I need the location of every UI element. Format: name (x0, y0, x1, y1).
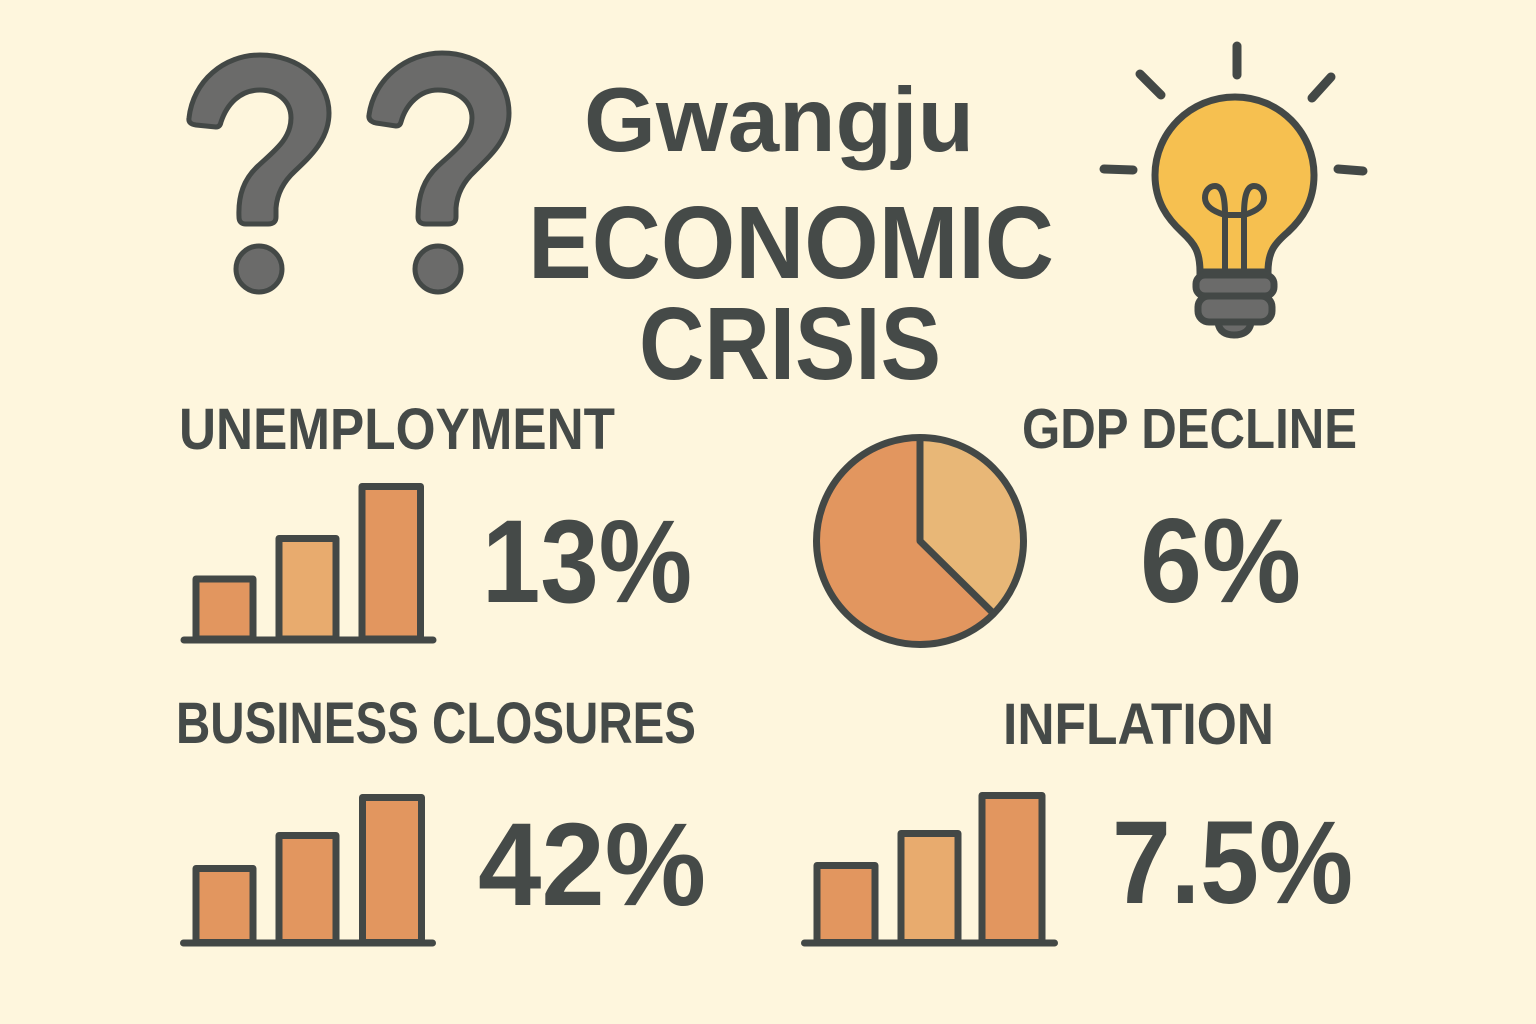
stat: 6%: 6% (1140, 494, 1301, 628)
bar chart: unemployment (184, 486, 433, 640)
icon: left question mark (189, 55, 329, 292)
icon: light bulb (1104, 46, 1363, 335)
heading: GDP DECLINE: GDP DECLINE (1022, 397, 1357, 461)
bar chart: inflation (804, 796, 1054, 943)
bar chart: business closures (184, 798, 432, 943)
heading: BUSINESS CLOSURES: BUSINESS CLOSURES (176, 691, 696, 756)
stat: 42%: 42% (478, 799, 706, 931)
heading: UNEMPLOYMENT: UNEMPLOYMENT (179, 397, 615, 462)
icon: right question mark (369, 53, 509, 292)
pie chart: GDP decline (816, 437, 1024, 644)
title: CRISIS: CRISIS (639, 286, 941, 401)
title: Gwangju: Gwangju (584, 70, 974, 171)
title: ECONOMIC: ECONOMIC (528, 185, 1054, 300)
stat: 7.5%: 7.5% (1112, 797, 1353, 929)
stat: 13%: 13% (482, 496, 692, 628)
heading: INFLATION: INFLATION (1003, 692, 1274, 757)
